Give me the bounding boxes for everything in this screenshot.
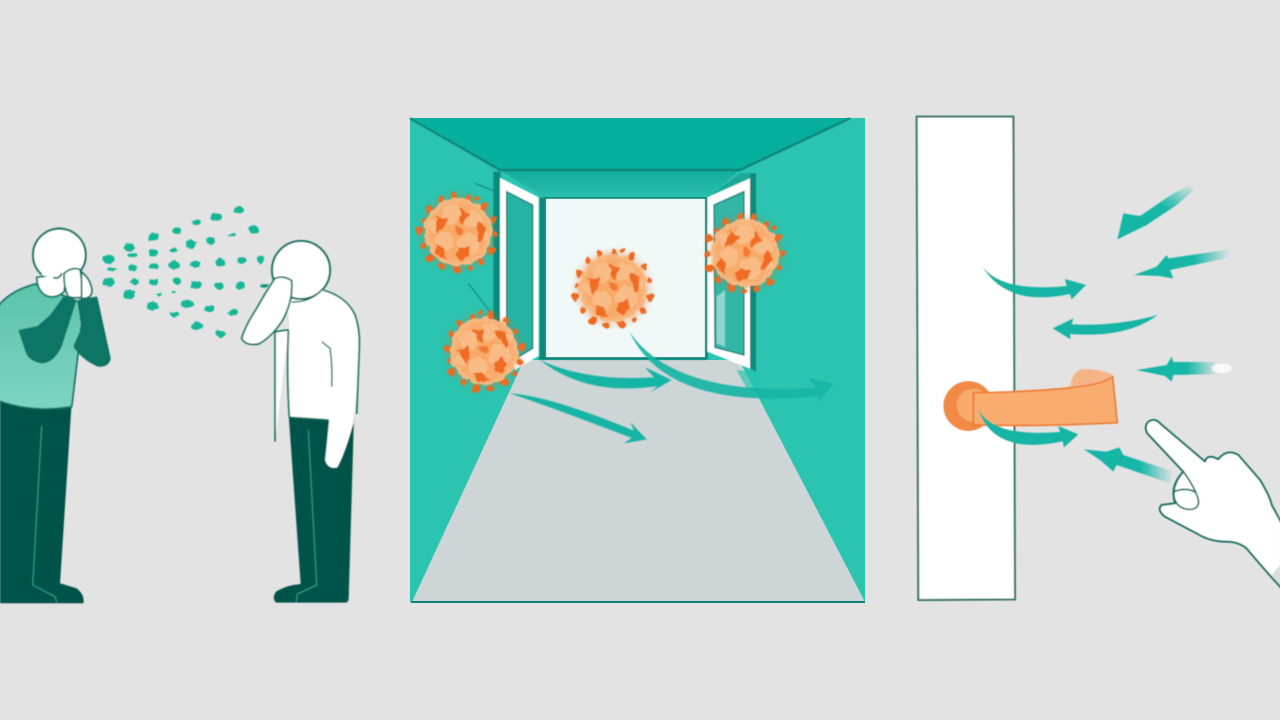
trousers	[274, 415, 354, 603]
wall streaks	[468, 183, 495, 318]
virus: upper left	[406, 180, 511, 284]
right pane	[714, 192, 744, 355]
lowered arm	[322, 342, 358, 468]
door	[917, 117, 1015, 600]
shirt	[0, 284, 82, 409]
neck line	[292, 289, 323, 302]
room lines	[410, 118, 850, 443]
virus: right	[688, 196, 803, 311]
ceiling lines	[410, 118, 850, 170]
long arrow	[629, 332, 833, 402]
window opening	[545, 198, 706, 358]
virus: centre	[569, 244, 658, 332]
white streak	[1212, 364, 1232, 373]
person covering face	[242, 241, 359, 603]
handle lip	[1070, 369, 1113, 386]
walls	[410, 118, 865, 602]
head overlay	[42, 247, 77, 277]
pane highlight	[717, 290, 725, 347]
head	[33, 229, 86, 281]
floor shadow	[737, 370, 770, 400]
sneezing person	[0, 229, 110, 603]
droplets	[102, 206, 269, 338]
handle lever	[973, 377, 1117, 425]
panel: droplet transmission between two people	[0, 206, 359, 603]
back wall band	[500, 170, 740, 198]
body outline	[275, 330, 328, 442]
dark arm	[74, 297, 110, 366]
floor edge line	[411, 601, 865, 603]
floor arrow near window	[540, 360, 672, 392]
floor	[412, 360, 865, 602]
jaw	[37, 273, 67, 297]
trousers	[0, 401, 84, 603]
left pane	[507, 192, 533, 360]
trouser crease	[33, 426, 57, 603]
sill	[539, 358, 707, 360]
post right	[705, 197, 708, 359]
trouser crease	[296, 430, 317, 603]
hands	[64, 269, 82, 298]
right frame	[750, 173, 756, 372]
handle rose inner	[957, 389, 990, 422]
arrow: fifth	[1137, 357, 1218, 382]
arrow: left	[1053, 315, 1158, 339]
second hand	[81, 272, 92, 298]
sleeve crease	[322, 342, 332, 387]
curled finger	[1173, 472, 1199, 509]
arrow: second	[1134, 249, 1230, 278]
raised arm	[242, 277, 292, 344]
body and sleeve	[275, 290, 359, 442]
arrow: top	[1117, 185, 1194, 239]
forearm	[18, 297, 76, 363]
right wedge	[707, 173, 750, 197]
head	[272, 241, 330, 299]
arrow: lower	[1084, 447, 1173, 483]
panel: door handle with contact transmission	[917, 117, 1280, 600]
neck patch	[287, 289, 328, 330]
lower arrow	[510, 393, 647, 443]
post left	[539, 197, 546, 359]
left frame	[493, 172, 501, 325]
arrow: curved from door	[982, 267, 1086, 299]
handle rose	[943, 381, 993, 431]
ceiling	[412, 118, 851, 170]
cuff	[1272, 563, 1280, 587]
mouth	[53, 273, 62, 278]
arrow: under handle	[978, 409, 1078, 447]
virus: lower left	[435, 301, 535, 401]
hand	[1146, 420, 1280, 588]
sneeze tick	[261, 285, 268, 287]
left sash	[500, 178, 539, 370]
right sash	[707, 178, 750, 369]
panel: room with window and airborne virus	[406, 118, 865, 602]
shoulder outline	[323, 290, 359, 414]
